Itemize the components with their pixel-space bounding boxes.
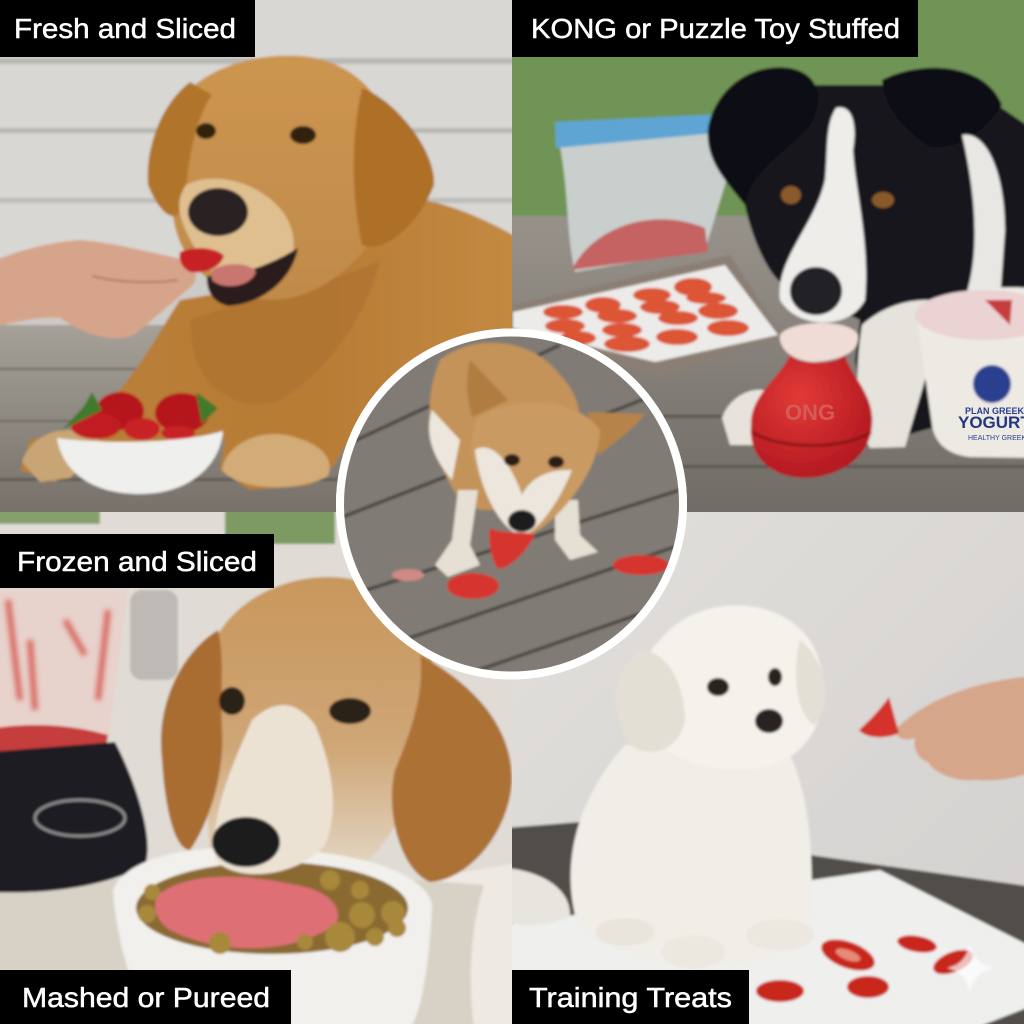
panel: fresh and sliced xyxy=(0,0,522,522)
bowl of kibble and puree xyxy=(113,848,432,1024)
label: Fresh and Sliced: Fresh and Sliced xyxy=(14,13,236,44)
label: Training Treats: Training Treats xyxy=(529,982,732,1013)
label: Frozen and Sliced: Frozen and Sliced xyxy=(17,546,257,577)
label: Fresh and Sliced xyxy=(0,0,255,57)
blender xyxy=(0,590,178,893)
center circle: shiba licking strawberry xyxy=(335,328,689,680)
label: KONG or Puzzle Toy Stuffed xyxy=(512,0,918,57)
strawberry slices on paper xyxy=(756,933,976,1002)
background: wooden deck xyxy=(0,324,348,512)
label: Mashed or Pureed xyxy=(0,970,291,1024)
white fluffy dog xyxy=(505,605,826,969)
label: Frozen and Sliced xyxy=(0,534,274,588)
border collie xyxy=(708,67,1024,448)
tray of strawberry slices xyxy=(513,255,782,377)
background: siding wall xyxy=(0,0,522,332)
background: room and floor xyxy=(0,505,522,1024)
label: KONG or Puzzle Toy Stuffed: KONG or Puzzle Toy Stuffed xyxy=(531,13,900,44)
yogurt tub lettering: PLAN GREEK xyxy=(965,406,1024,416)
shiba dog xyxy=(429,343,645,577)
yogurt tub lettering xyxy=(958,406,1024,442)
deck boards xyxy=(335,330,689,680)
hand holding strawberry xyxy=(0,240,224,338)
panel: mashed or pureed xyxy=(0,505,522,1024)
beagle xyxy=(161,577,522,1024)
label: Mashed or Pureed: Mashed or Pureed xyxy=(22,982,270,1013)
panel: KONG or puzzle toy stuffed xyxy=(505,0,1024,522)
background: wall and table xyxy=(505,505,1024,1024)
sparkle mark xyxy=(946,948,988,988)
licked strawberry slices xyxy=(392,528,669,599)
yogurt tub xyxy=(915,287,1024,458)
bowl of strawberries xyxy=(57,392,223,494)
beagle muzzle and nose xyxy=(212,705,333,874)
red KONG toy xyxy=(751,323,872,478)
golden retriever xyxy=(20,56,522,490)
hand holding strawberry treat xyxy=(859,676,1024,781)
zip bag of strawberries xyxy=(555,114,728,272)
background: grass and deck xyxy=(505,0,1024,522)
label: Training Treats xyxy=(512,970,749,1024)
panel: training treats xyxy=(505,505,1024,1024)
KONG toy lettering: ONG xyxy=(785,400,835,425)
